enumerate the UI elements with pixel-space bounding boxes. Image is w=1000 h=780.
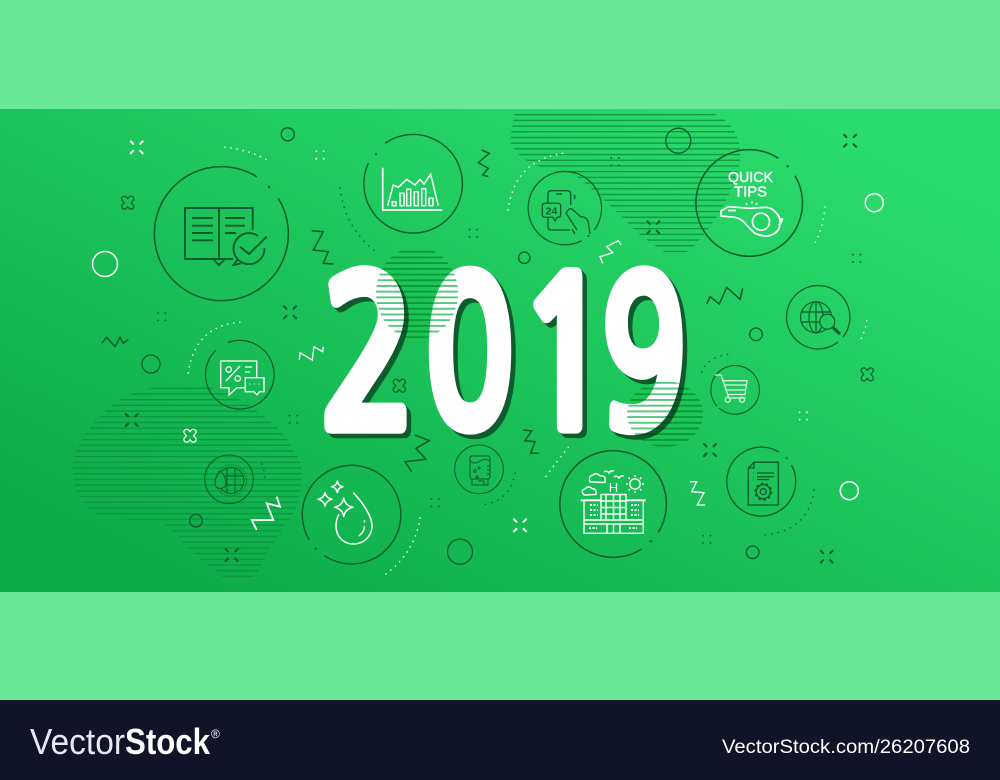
icon: whistle [721,202,782,236]
icon: area and bar chart [383,168,442,210]
title: 2019: 1 [516,255,616,459]
footer logo: VectorStock [30,721,220,762]
striped blob: top centre [510,110,740,256]
decorative scatter: dark rings [142,128,762,564]
top light green band [0,0,1000,109]
decorative scatter: white tick crosses [131,141,526,531]
decorative scatter: white rings [92,194,883,500]
badge: hotel building [560,451,666,557]
footer logo: VectorStock: ® [211,727,220,741]
dotted arcs: white [188,147,867,574]
footer logo: VectorStock: Vector [30,721,125,762]
icon: hotel: H [609,480,618,495]
footer logo: VectorStock: Stock [125,721,211,762]
badge: discount chat [205,340,274,409]
badge: 24 hour phone support [528,171,602,245]
title: 2019 [319,254,687,459]
striped blob over the 2 and 0 [376,247,458,339]
badge: document with gear [727,447,796,516]
decorative scatter: white dot squares [316,151,807,420]
icon: percent and chat bubbles [221,361,264,395]
icon: globe and magnifier [800,302,840,334]
badge: globe and drop [205,455,253,504]
title: 2019: 2 [319,255,417,459]
decorative scatter: dark tick crosses [126,135,856,563]
badge: shopping cart [711,366,759,414]
badge: quick tips whistle [696,150,802,256]
badge: water drop with sparkles [302,465,401,564]
badge: open book with check [154,167,288,301]
title: 2019: 9 [600,256,687,459]
icon: cart [715,375,747,402]
decorative scatter: white zigzags [252,241,705,530]
main green panel [0,109,1000,592]
icon: cooler [470,456,490,485]
icon: document [748,462,778,505]
dotted arcs: dark [262,188,814,535]
decorative scatter: dark dot squares [158,158,860,543]
lower light green band [0,592,1000,700]
footer image id: VectorStock.com/26207608 [722,736,970,758]
badge: chart [364,134,462,233]
icon: drop [318,481,372,544]
icon: phone with hand: 24 [546,206,557,218]
title: 2019: 0 [424,254,515,459]
striped blob: large left [73,387,302,581]
striped blob over the 9 [627,381,703,447]
icon: drop and globe [215,465,246,496]
text: quick tips: QUICK [728,169,773,186]
badge: quick tips whistle: TIPS [734,184,767,200]
badge: water cooler [455,445,503,494]
footer bar [0,700,1000,780]
badge: globe search [787,286,850,349]
decorative scatter: clover shapes [122,196,873,442]
icon: book [185,208,267,265]
decorative scatter: dark zigzags [102,150,743,472]
